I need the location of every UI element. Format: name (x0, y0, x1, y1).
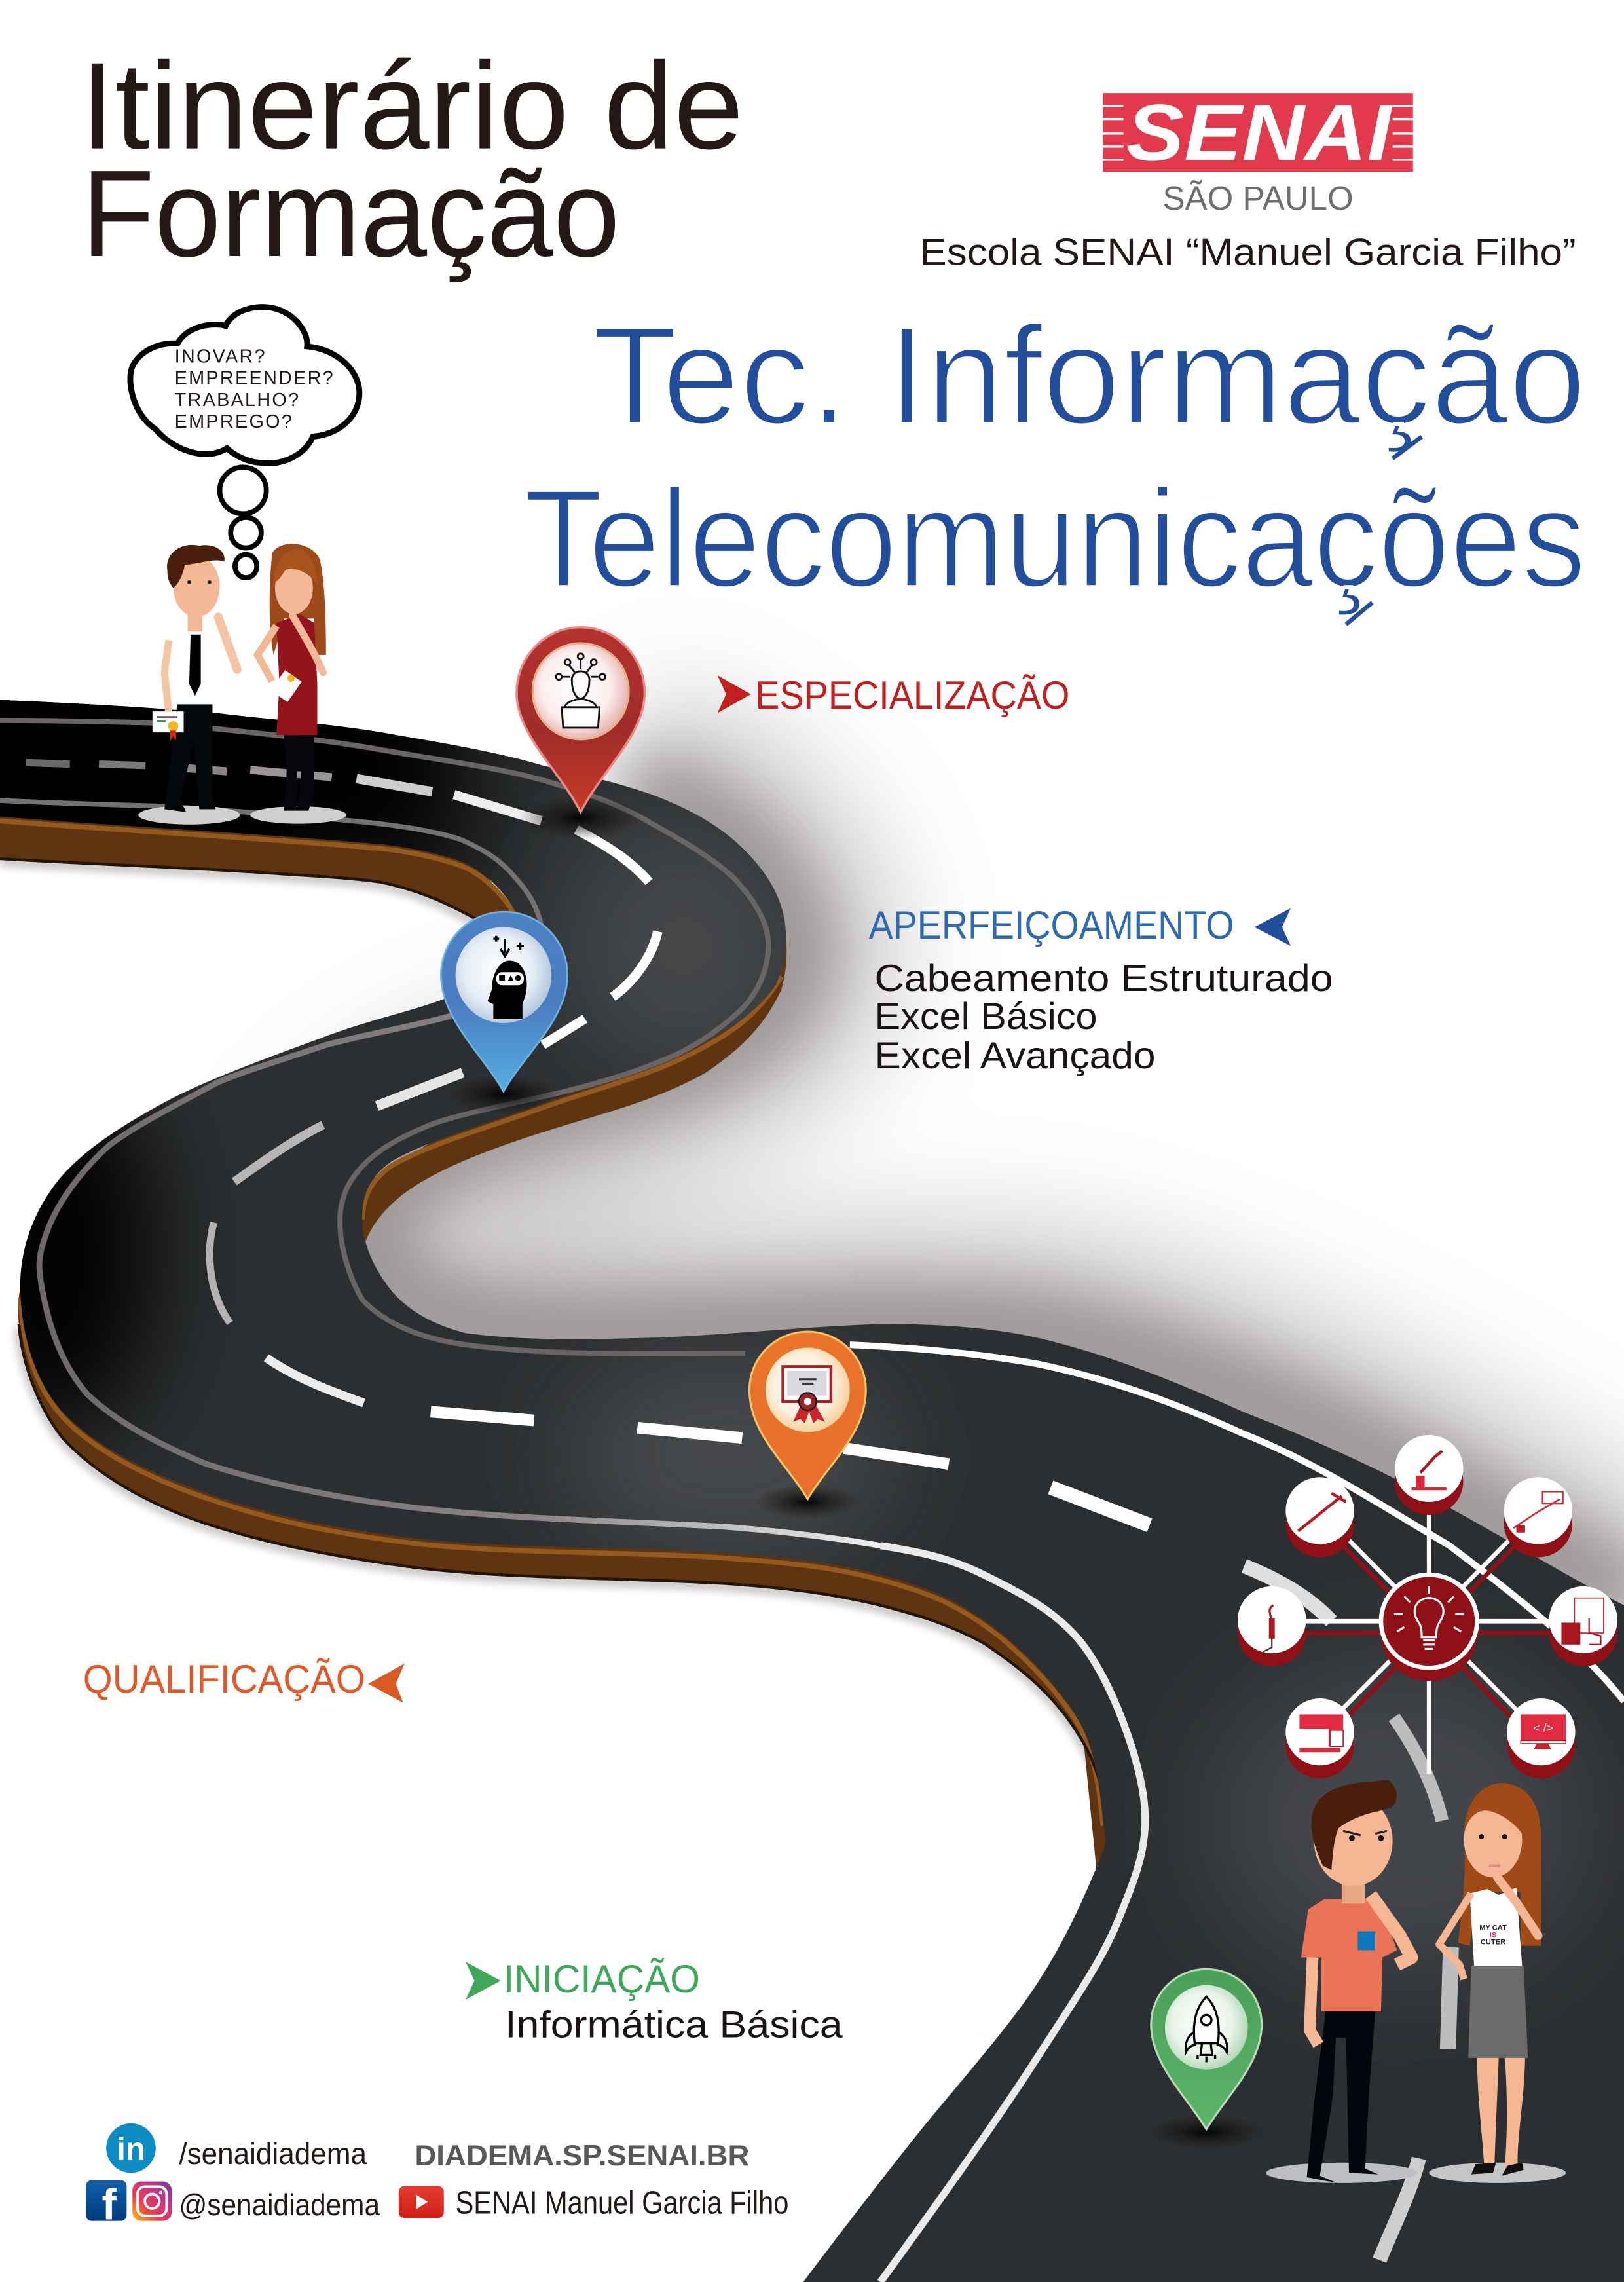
arrow: especialização (718, 675, 751, 713)
icon: rocket (1186, 1996, 1227, 2062)
linkedin handle: /senaidiadema (179, 2137, 367, 2171)
hub diagram (1238, 1435, 1617, 1778)
thought bubble (130, 307, 360, 578)
icon: facebook: f (102, 2180, 117, 2229)
title (80, 37, 744, 283)
thought bubble: TRABALHO? (175, 390, 300, 411)
course heading: Tec. Informação: Tec. Informação (592, 298, 1586, 454)
icon: facebook (86, 2180, 126, 2229)
title: Itinerário de (80, 37, 744, 176)
logo SENAI São Paulo: SÃO PAULO (1163, 179, 1354, 217)
node: caliper (1285, 1477, 1354, 1557)
title: Formação (81, 145, 620, 283)
pin: qualificação (orange) (749, 1332, 866, 1520)
icon: head with shapes (487, 936, 526, 1019)
label: especialização: ESPECIALIZAÇÃO (755, 673, 1069, 717)
school name: Escola SENAI “Manuel Garcia Filho” (919, 231, 1576, 273)
node: electronics (1504, 1477, 1572, 1557)
icon: linkedin: in (117, 2131, 145, 2167)
road drop shadow (0, 786, 1624, 1958)
woman in red dress (250, 544, 346, 824)
node: tablet touch (1549, 1586, 1617, 1666)
woman in grey skirt: CUTER (1481, 1939, 1505, 1947)
pin: iniciação (green) (1145, 1969, 1268, 2150)
top couple standing on road (138, 544, 346, 825)
thought bubble: EMPREGO? (175, 411, 293, 432)
courses: aperfeiçoamento: Excel Básico (875, 996, 1098, 1038)
instagram handle: @senaidiadema (179, 2188, 380, 2222)
woman in grey skirt (1429, 1783, 1566, 2183)
man in coral shirt (1266, 1780, 1417, 2183)
arrow: iniciação (466, 1962, 500, 2000)
icon: youtube (399, 2186, 444, 2218)
thought bubble: EMPREENDER? (175, 368, 335, 389)
woman in grey skirt: IS (1490, 1931, 1496, 1939)
foreground couple (1266, 1780, 1566, 2183)
arrow: qualificação (368, 1664, 405, 1703)
icon: person with network nodes at laptop (556, 654, 605, 728)
woman in grey skirt: MY CAT (1479, 1924, 1507, 1932)
arrow: aperfeiçoamento (1255, 908, 1291, 946)
social links footer (86, 2123, 788, 2229)
road edge lines (0, 720, 1624, 2282)
node: monitor: < /> (1533, 1721, 1553, 1734)
node: monitor (1507, 1698, 1576, 1778)
label: aperfeiçoamento: APERFEIÇOAMENTO (869, 903, 1234, 947)
road centre dashes (26, 762, 1451, 2260)
logo SENAI São Paulo (1103, 87, 1413, 217)
icon: certificate (783, 1366, 831, 1423)
road asphalt surface (0, 641, 1624, 2282)
icon: instagram (132, 2182, 172, 2221)
website: DIADEMA.SP.SENAI.BR (415, 2140, 749, 2172)
courses: aperfeiçoamento: Cabeamento Estruturado (875, 958, 1333, 1000)
courses: aperfeiçoamento: Excel Avançado (875, 1035, 1155, 1077)
youtube channel: SENAI Manuel Garcia Filho (456, 2186, 788, 2221)
node: soldering iron (1238, 1586, 1306, 1666)
man with tie (138, 545, 240, 825)
node: robot arm (1395, 1435, 1463, 1515)
spokes (1272, 1482, 1583, 1774)
courses: aperfeiçoamento (875, 958, 1333, 1077)
label: qualificação: QUALIFICAÇÃO (83, 1657, 365, 1701)
thought bubble: INOVAR? (175, 346, 267, 367)
centre lightbulb (1381, 1575, 1477, 1681)
logo SENAI São Paulo: SENAI (1126, 87, 1393, 177)
course: iniciação: Informática Básica (505, 2004, 843, 2046)
icon: linkedin (106, 2123, 156, 2173)
road brown side (0, 786, 1108, 1877)
pin: aperfeiçoamento (blue) (441, 912, 568, 1115)
pin: especialização (red) (517, 627, 644, 840)
node: sewing machine (1285, 1698, 1354, 1778)
label: iniciação: INICIAÇÃO (504, 1957, 700, 2001)
